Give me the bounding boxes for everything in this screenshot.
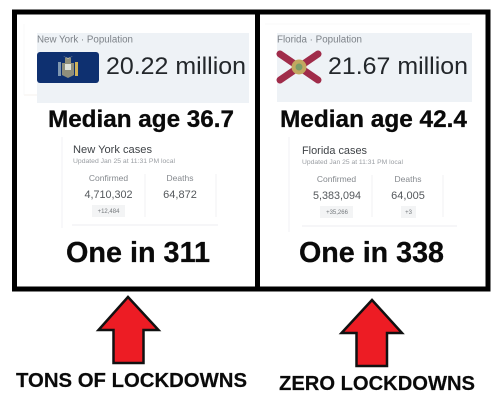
population card: Florida: [277, 33, 472, 102]
confirmed stat: Florida: +35,266: [326, 210, 349, 216]
confirmed stat: New York: 4,710,302: [84, 189, 132, 201]
update time: New York: Updated Jan 25 at 11:31 PM local: [73, 159, 175, 165]
deaths stat: New York: Deaths: [167, 173, 193, 183]
update time: Florida: Updated Jan 25 at 11:31 PM local: [302, 160, 403, 166]
confirmed stat: Florida: 5,383,094: [313, 190, 361, 202]
heading: New York median age: Median age 36.7: [48, 106, 234, 133]
confirmed stat: New York: [84, 173, 132, 217]
confirmed stat: Florida: [313, 174, 361, 218]
deaths stat: Florida: 64,005: [391, 190, 425, 202]
confirmed stat: New York: +12,484: [98, 209, 120, 215]
heading: Florida median age: Median age 42.4: [280, 106, 467, 133]
cases title: Florida: Florida cases: [302, 145, 367, 157]
cases card: New York: [62, 137, 218, 228]
deaths stat: Florida: +3: [405, 210, 413, 216]
panel: New York: [24, 24, 255, 287]
icon: New York flag: [37, 52, 99, 83]
label: zero lockdowns: ZERO LOCKDOWNS: [279, 372, 475, 395]
statistic: Florida one in 338: One in 338: [299, 237, 444, 269]
statistic: New York one in 311: One in 311: [66, 237, 210, 269]
deaths stat: Florida: [391, 174, 425, 218]
label: tons of lockdowns: TONS OF LOCKDOWNS: [16, 369, 247, 392]
cases card: Florida: [289, 137, 457, 232]
deaths stat: New York: 64,872: [163, 189, 197, 201]
population card: New York: [37, 33, 249, 103]
confirmed stat: Florida: Confirmed: [317, 174, 356, 184]
arrow: Florida: [342, 300, 402, 366]
icon: Florida flag: [280, 54, 318, 80]
comparison frame: [14, 12, 488, 289]
population figure: Florida: 21.67 million: [328, 53, 468, 80]
cases title: New York: New York cases: [73, 144, 153, 156]
confirmed stat: New York: Confirmed: [89, 173, 128, 183]
population label: Florida: Florida · Population: [277, 34, 362, 46]
deaths stat: New York: [163, 173, 197, 201]
population figure: New York: 20.22 million: [106, 53, 246, 80]
population label: New York: New York · Population: [37, 34, 133, 46]
panel: Florida: [260, 14, 484, 287]
deaths stat: Florida: Deaths: [395, 174, 421, 184]
arrow: New York: [98, 297, 158, 363]
